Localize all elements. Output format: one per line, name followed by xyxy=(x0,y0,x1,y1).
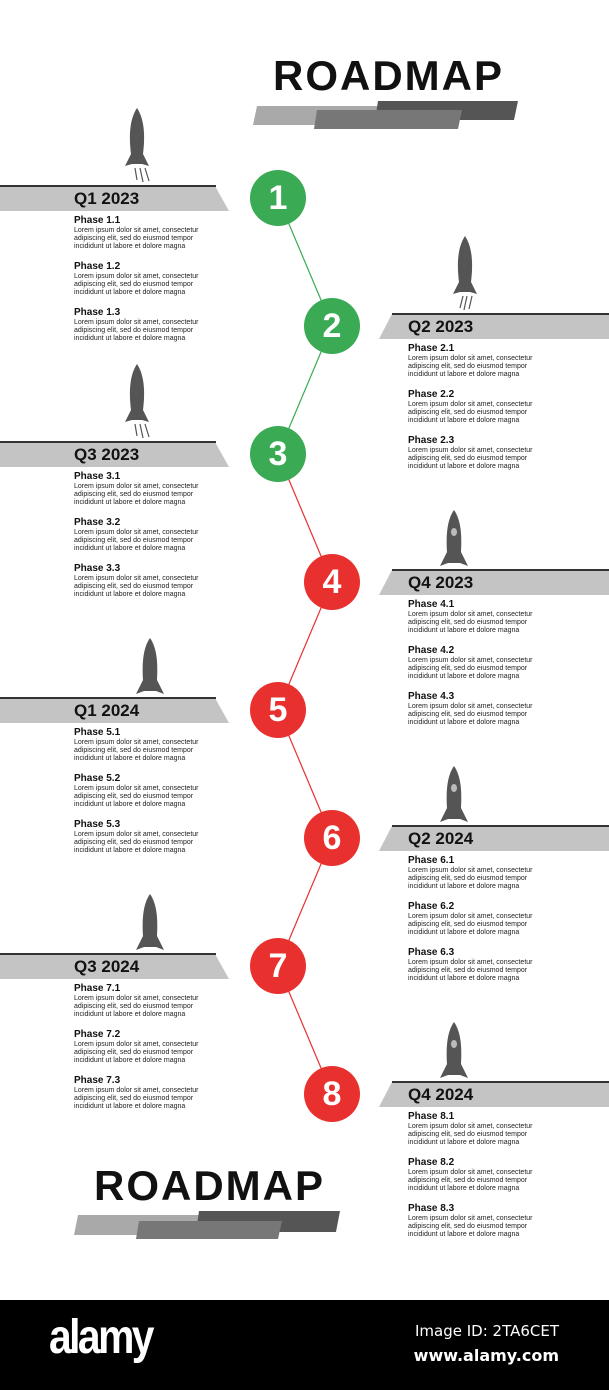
phases: Lorem ipsum dolor sit amet, consectetur adipiscing elit, sed do eiusmod tempor incididunt ut labore et dolore magna xyxy=(74,739,198,762)
circle 7: 7 xyxy=(269,947,287,985)
phases: Phase 3.2 xyxy=(74,517,120,528)
section Q1 2023 xyxy=(0,108,229,342)
section Q2 2024 xyxy=(379,766,609,982)
phases: Lorem ipsum dolor sit amet, consectetur adipiscing elit, sed do eiusmod tempor incididunt ut labore et dolore magna xyxy=(74,529,198,552)
phases xyxy=(74,983,198,1110)
phases: Phase 7.3 xyxy=(74,1075,120,1086)
phases: Lorem ipsum dolor sit amet, consectetur adipiscing elit, sed do eiusmod tempor incididunt ut labore et dolore magna xyxy=(408,401,532,424)
section Q2 2023: Q2 2023 xyxy=(408,317,473,336)
phases: Lorem ipsum dolor sit amet, consectetur adipiscing elit, sed do eiusmod tempor incididunt ut labore et dolore magna xyxy=(74,1087,198,1110)
phases: Phase 2.3 xyxy=(408,435,454,446)
phases: Lorem ipsum dolor sit amet, consectetur adipiscing elit, sed do eiusmod tempor incididunt ut labore et dolore magna xyxy=(74,483,198,506)
band xyxy=(379,569,609,595)
phases: Phase 1.3 xyxy=(74,307,120,318)
phases: Lorem ipsum dolor sit amet, consectetur adipiscing elit, sed do eiusmod tempor incididunt ut labore et dolore magna xyxy=(74,319,198,342)
circle 5 xyxy=(250,682,306,738)
image id: Image ID: 2TA6CET xyxy=(415,1322,559,1340)
phases: Phase 3.3 xyxy=(74,563,120,574)
band xyxy=(379,313,609,339)
phases: Lorem ipsum dolor sit amet, consectetur adipiscing elit, sed do eiusmod tempor incididunt ut labore et dolore magna xyxy=(74,227,198,250)
circle 6: 6 xyxy=(323,819,341,857)
phases: Phase 8.3 xyxy=(408,1203,454,1214)
band xyxy=(0,185,229,211)
rocket standing xyxy=(440,1022,468,1078)
title bottom: ROADMAP xyxy=(94,1162,325,1209)
phases: Phase 3.1 xyxy=(74,471,120,482)
phases: Lorem ipsum dolor sit amet, consectetur adipiscing elit, sed do eiusmod tempor incididunt ut labore et dolore magna xyxy=(408,1123,532,1146)
phases: Lorem ipsum dolor sit amet, consectetur adipiscing elit, sed do eiusmod tempor incididunt ut labore et dolore magna xyxy=(74,273,198,296)
phases: Lorem ipsum dolor sit amet, consectetur adipiscing elit, sed do eiusmod tempor incididunt ut labore et dolore magna xyxy=(408,447,532,470)
circle 8: 8 xyxy=(323,1075,341,1113)
phases: Phase 2.1 xyxy=(408,343,454,354)
section Q3 2024 xyxy=(0,894,229,1110)
phases: Lorem ipsum dolor sit amet, consectetur adipiscing elit, sed do eiusmod tempor incididunt ut labore et dolore magna xyxy=(408,913,532,936)
phases: Lorem ipsum dolor sit amet, consectetur adipiscing elit, sed do eiusmod tempor incididunt ut labore et dolore magna xyxy=(408,703,532,726)
section Q1 2024: Q1 2024 xyxy=(74,701,139,720)
phases: Phase 7.2 xyxy=(74,1029,120,1040)
section Q4 2024 xyxy=(379,1022,609,1238)
circle 7 xyxy=(250,938,306,994)
section Q2 2023 xyxy=(379,236,609,470)
circle 5: 5 xyxy=(269,691,287,729)
section Q3 2023 xyxy=(0,364,229,598)
rocket standing xyxy=(440,510,468,566)
phases: Phase 8.2 xyxy=(408,1157,454,1168)
phases: Phase 7.1 xyxy=(74,983,120,994)
footer xyxy=(0,1300,609,1390)
rocket xyxy=(453,236,477,310)
section Q3 2023: Q3 2023 xyxy=(74,445,139,464)
phases: Lorem ipsum dolor sit amet, consectetur adipiscing elit, sed do eiusmod tempor incididunt ut labore et dolore magna xyxy=(74,785,198,808)
rocket standing xyxy=(440,766,468,822)
section Q4 2024: Q4 2024 xyxy=(408,1085,473,1104)
phases xyxy=(408,599,532,726)
circle 1 xyxy=(250,170,306,226)
phases: Phase 4.2 xyxy=(408,645,454,656)
circle 1: 1 xyxy=(269,179,287,217)
title top: ROADMAP xyxy=(273,52,504,99)
phases: Lorem ipsum dolor sit amet, consectetur adipiscing elit, sed do eiusmod tempor incididunt ut labore et dolore magna xyxy=(408,959,532,982)
phases: Phase 4.3 xyxy=(408,691,454,702)
band xyxy=(0,953,229,979)
phases: Lorem ipsum dolor sit amet, consectetur adipiscing elit, sed do eiusmod tempor incididunt ut labore et dolore magna xyxy=(408,1215,532,1238)
title bars bottom xyxy=(74,1211,340,1239)
section Q4 2023 xyxy=(379,510,609,726)
phases: Lorem ipsum dolor sit amet, consectetur adipiscing elit, sed do eiusmod tempor incididunt ut labore et dolore magna xyxy=(408,657,532,680)
circle 2: 2 xyxy=(323,307,341,345)
rocket standing xyxy=(136,638,164,694)
circle 6 xyxy=(304,810,360,866)
phases: Phase 6.2 xyxy=(408,901,454,912)
circle 4: 4 xyxy=(323,563,341,601)
phases: Lorem ipsum dolor sit amet, consectetur adipiscing elit, sed do eiusmod tempor incididunt ut labore et dolore magna xyxy=(408,1169,532,1192)
section Q4 2023: Q4 2023 xyxy=(408,573,473,592)
phases: Phase 5.2 xyxy=(74,773,120,784)
phases: Lorem ipsum dolor sit amet, consectetur adipiscing elit, sed do eiusmod tempor incididunt ut labore et dolore magna xyxy=(408,867,532,890)
band xyxy=(379,825,609,851)
phases xyxy=(74,727,198,854)
circle 3: 3 xyxy=(269,435,287,473)
rocket xyxy=(125,364,150,438)
section Q1 2024 xyxy=(0,638,229,854)
band xyxy=(0,697,229,723)
phases: Lorem ipsum dolor sit amet, consectetur adipiscing elit, sed do eiusmod tempor incididunt ut labore et dolore magna xyxy=(74,575,198,598)
phases xyxy=(74,471,198,598)
circle 8 xyxy=(304,1066,360,1122)
phases: Phase 4.1 xyxy=(408,599,454,610)
phases: Lorem ipsum dolor sit amet, consectetur adipiscing elit, sed do eiusmod tempor incididunt ut labore et dolore magna xyxy=(408,611,532,634)
section Q2 2024: Q2 2024 xyxy=(408,829,473,848)
phases: Phase 5.1 xyxy=(74,727,120,738)
phases: Lorem ipsum dolor sit amet, consectetur adipiscing elit, sed do eiusmod tempor incididunt ut labore et dolore magna xyxy=(74,1041,198,1064)
phases: Lorem ipsum dolor sit amet, consectetur adipiscing elit, sed do eiusmod tempor incididunt ut labore et dolore magna xyxy=(408,355,532,378)
phases: Phase 1.1 xyxy=(74,215,120,226)
phases xyxy=(408,1111,532,1238)
phases: Phase 1.2 xyxy=(74,261,120,272)
phases: Phase 6.1 xyxy=(408,855,454,866)
logo: alamy xyxy=(49,1311,152,1364)
phases: Phase 5.3 xyxy=(74,819,120,830)
circle 2 xyxy=(304,298,360,354)
phases: Lorem ipsum dolor sit amet, consectetur adipiscing elit, sed do eiusmod tempor incididunt ut labore et dolore magna xyxy=(74,995,198,1018)
circle 4 xyxy=(304,554,360,610)
phases: Phase 8.1 xyxy=(408,1111,454,1122)
phases: Phase 6.3 xyxy=(408,947,454,958)
phases: Lorem ipsum dolor sit amet, consectetur adipiscing elit, sed do eiusmod tempor incididunt ut labore et dolore magna xyxy=(74,831,198,854)
phases xyxy=(408,343,532,470)
phases: Phase 2.2 xyxy=(408,389,454,400)
phases xyxy=(74,215,198,342)
band xyxy=(0,441,229,467)
title bars top xyxy=(253,101,518,129)
section Q1 2023: Q1 2023 xyxy=(74,189,139,208)
phases xyxy=(408,855,532,982)
section Q3 2024: Q3 2024 xyxy=(74,957,139,976)
band xyxy=(379,1081,609,1107)
rocket xyxy=(125,108,150,182)
circle 3 xyxy=(250,426,306,482)
rocket standing xyxy=(136,894,164,950)
url: www.alamy.com xyxy=(414,1346,559,1365)
